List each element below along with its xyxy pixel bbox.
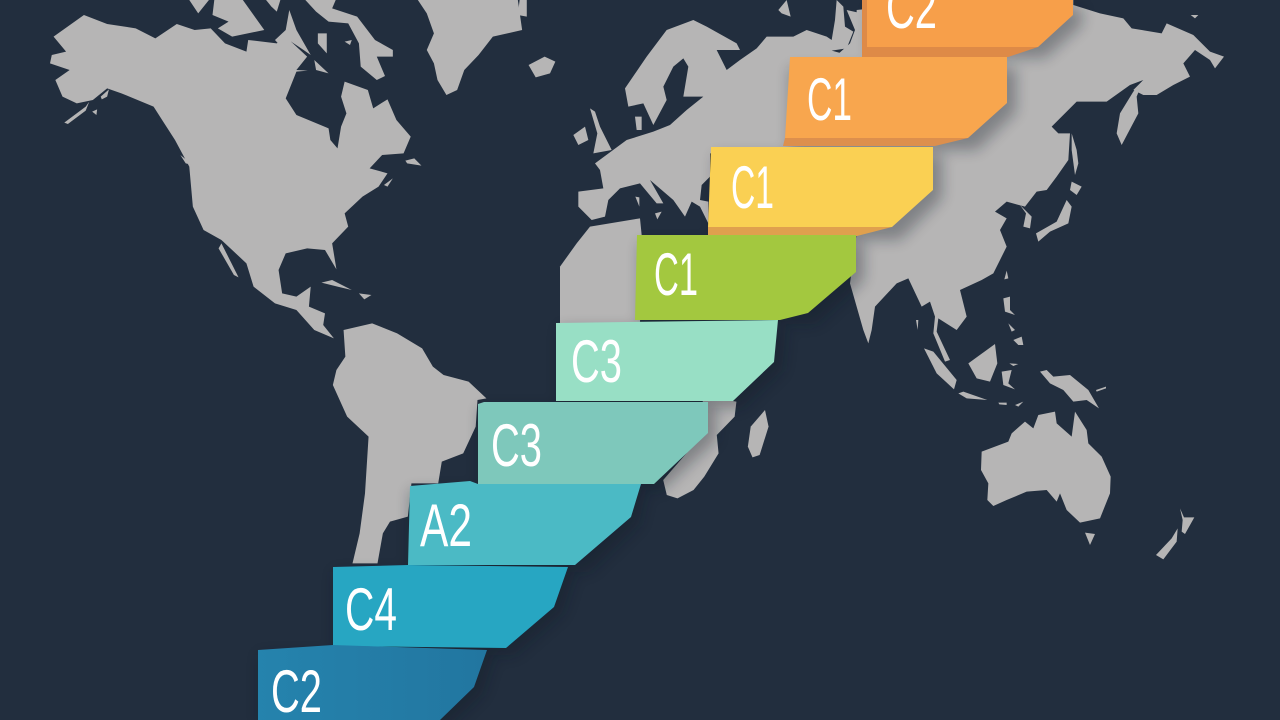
- shadows cast by ribbons: [260, 8, 1082, 720]
- ribbon: A2 teal: [408, 481, 641, 565]
- Tasmania: [1085, 533, 1095, 545]
- ribbon: C3 mint: [556, 320, 778, 401]
- Madagascar: [748, 410, 769, 457]
- Iceland: [529, 57, 555, 77]
- Java: [958, 392, 987, 400]
- Europe and North Africa: [560, 0, 862, 323]
- ribbon: C1 yellow: C1: [731, 154, 774, 221]
- Asia: [850, 0, 1224, 362]
- ribbon: C3 teal-green: [478, 402, 708, 484]
- ribbon: C3 mint: C3: [571, 328, 622, 395]
- ribbon: C2 orange top: [862, 0, 1073, 57]
- New Zealand: [1180, 508, 1194, 534]
- ribbon: C1 light orange: C1: [807, 66, 852, 133]
- Australia: [981, 412, 1111, 523]
- ribbon: C1 green: [635, 235, 856, 320]
- ribbon: C3 teal-green: C3: [491, 412, 542, 479]
- ribbon: C4 blue-teal: C4: [345, 576, 397, 643]
- Sulawesi: [1002, 370, 1015, 389]
- Sumatra: [924, 348, 957, 389]
- Southeast Asia and Oceania: [916, 297, 1194, 559]
- North America and Arctic islands: [50, 0, 555, 338]
- ribbon: C1 green: C1: [654, 241, 698, 308]
- South America and East Africa: [333, 323, 769, 563]
- New Guinea: [1040, 370, 1099, 408]
- Borneo: [968, 344, 997, 382]
- ribbon: C4 blue-teal: [333, 565, 568, 648]
- Philippines: [1003, 297, 1015, 315]
- world map: [50, 0, 1224, 563]
- ribbon: C1 yellow: [708, 147, 933, 236]
- ribbon: A2 teal: A2: [420, 492, 472, 559]
- Greenland: [418, 0, 522, 95]
- ribbon: C2 blue: [258, 645, 487, 720]
- ribbon: C1 light orange: [783, 57, 1007, 146]
